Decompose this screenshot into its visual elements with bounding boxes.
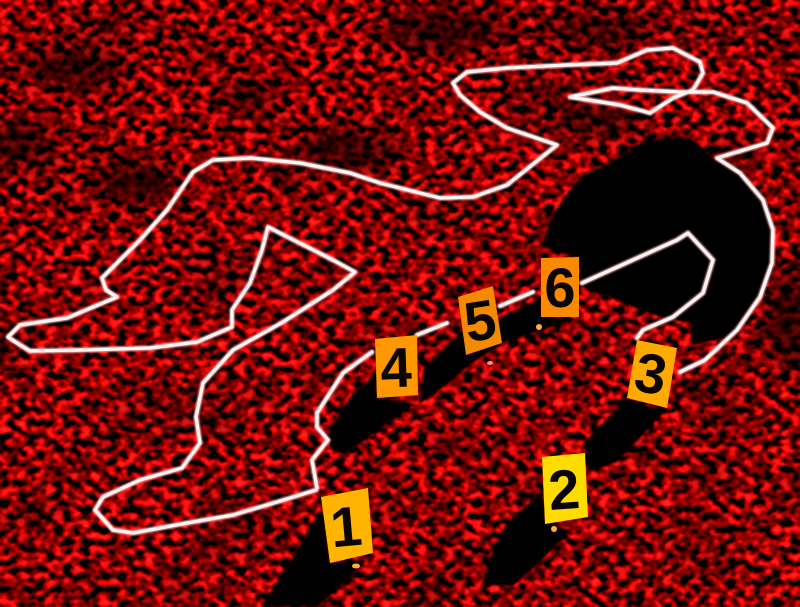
evidence marker 5: 5	[460, 287, 500, 354]
evidence marker 3: 3	[630, 340, 672, 407]
small reflective spots near markers	[352, 324, 557, 568]
evidence marker 4: 4	[379, 335, 413, 400]
shadow of marker 2	[482, 492, 570, 586]
shadow of marker 4	[329, 375, 415, 454]
chalk body outline	[8, 48, 773, 533]
black shadow pool behind the head and arm	[543, 138, 773, 345]
evidence marker 6: 6	[544, 256, 576, 319]
evidence marker 1: 1	[328, 494, 364, 559]
evidence marker 2: 2	[546, 457, 582, 522]
shadow of marker 5 and 6	[419, 298, 577, 404]
shadow of marker 3	[585, 398, 664, 472]
evidence marker 1	[321, 488, 373, 563]
shadow of marker 1	[262, 508, 367, 607]
marker shadows	[262, 298, 664, 607]
